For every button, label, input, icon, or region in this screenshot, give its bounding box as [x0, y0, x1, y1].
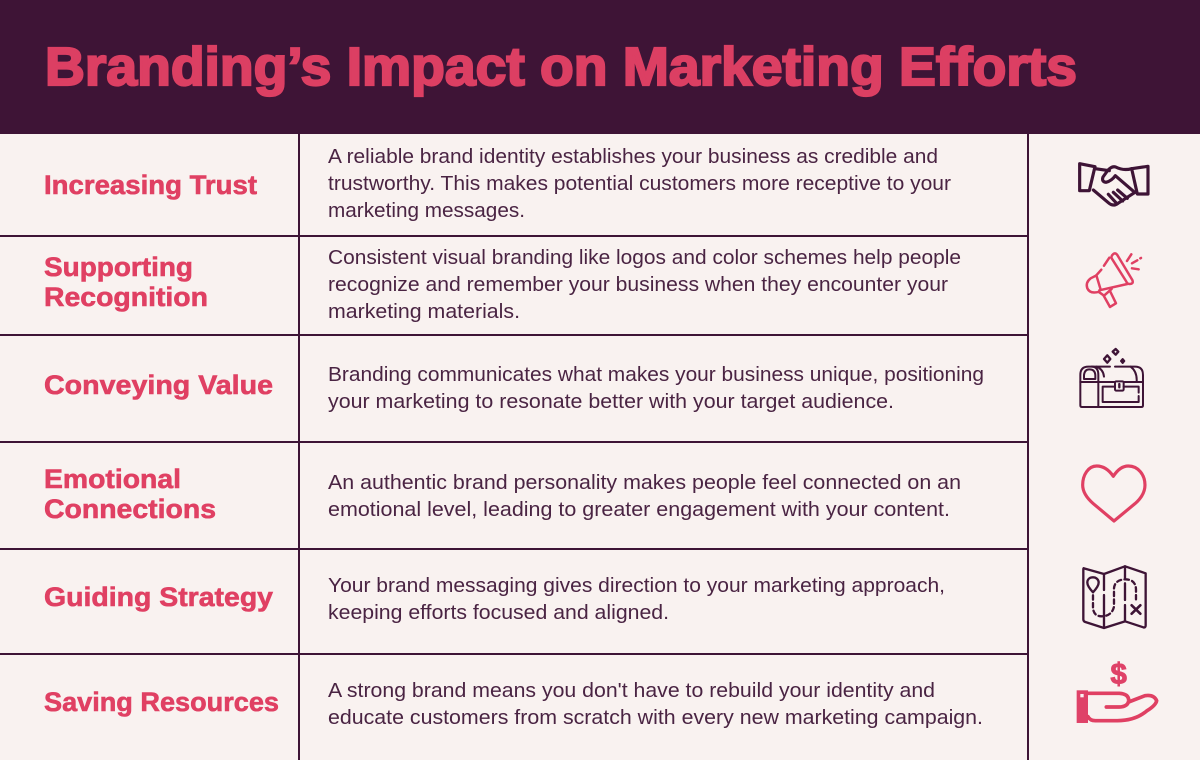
- heading: Increasing Trust: Increasing Trust: [44, 170, 257, 200]
- icon: treasure chest: [1080, 349, 1143, 407]
- heading: Emotional Connections: Connections: [44, 494, 216, 524]
- text: Supporting Recognition description: [328, 246, 961, 323]
- heading: Supporting Recognition: Supporting: [44, 252, 193, 282]
- row: Supporting Recognition: [44, 246, 961, 323]
- text: Emotional Connections description: [328, 471, 961, 521]
- text: Conveying Value description: [328, 363, 984, 413]
- text: Guiding Strategy description: keeping efforts focused and aligned.: [328, 601, 669, 624]
- heading: Guiding Strategy: Guiding Strategy: [44, 582, 273, 612]
- text: Emotional Connections description: An authentic brand personality makes people feel connected on an: [328, 471, 961, 494]
- text: Conveying Value description: your marketing to resonate better with your target audience.: [328, 390, 894, 413]
- icon: treasure map: [1083, 566, 1146, 628]
- text: Increasing Trust description: marketing messages.: [328, 199, 525, 222]
- text: Guiding Strategy description: [328, 574, 945, 624]
- icon: handshake: [1080, 164, 1148, 205]
- text: Emotional Connections description: emotional level, leading to greater engagement with your content.: [328, 498, 950, 521]
- row: Increasing Trust: [44, 145, 951, 222]
- text: Increasing Trust description: [328, 145, 951, 222]
- heading: Emotional Connections: [44, 464, 216, 524]
- heading: Saving Resources: Saving Resources: [44, 687, 279, 717]
- heading: Emotional Connections: Emotional: [44, 464, 181, 494]
- heading: Supporting Recognition: Recognition: [44, 282, 208, 312]
- header band: [0, 0, 1200, 134]
- heading: Supporting Recognition: [44, 252, 208, 312]
- text: Saving Resources description: [328, 679, 983, 729]
- row: Saving Resources: [44, 679, 983, 729]
- text: Supporting Recognition description: recognize and remember your business when they encounter your: [328, 273, 948, 296]
- text: Supporting Recognition description: Consistent visual branding like logos and color schemes help people: [328, 246, 961, 269]
- text: Increasing Trust description: A reliable brand identity establishes your business as credible and: [328, 145, 938, 168]
- text: Saving Resources description: educate customers from scratch with every new marketing campaign.: [328, 706, 983, 729]
- text: Saving Resources description: A strong brand means you don't have to rebuild your identity and: [328, 679, 935, 702]
- row: Guiding Strategy: [44, 574, 945, 624]
- text: Guiding Strategy description: Your brand messaging gives direction to your marketing approach,: [328, 574, 945, 597]
- heading: Conveying Value: Conveying Value: [44, 370, 273, 400]
- title: Branding’s Impact on Marketing Efforts: [45, 37, 1077, 97]
- icon: hand with dollar: [1077, 658, 1157, 723]
- text: Supporting Recognition description: marketing materials.: [328, 300, 520, 323]
- icon: megaphone: [1087, 253, 1141, 307]
- icon: hand with dollar: $: [1111, 658, 1127, 691]
- text: Increasing Trust description: trustworthy. This makes potential customers more receptive to your: [328, 172, 951, 195]
- row: Conveying Value: [44, 363, 984, 413]
- icon: heart: [1083, 466, 1145, 521]
- table grid: [0, 134, 1028, 760]
- text: Conveying Value description: Branding communicates what makes your business unique, positioning: [328, 363, 984, 386]
- row: Emotional Connections: [44, 464, 961, 524]
